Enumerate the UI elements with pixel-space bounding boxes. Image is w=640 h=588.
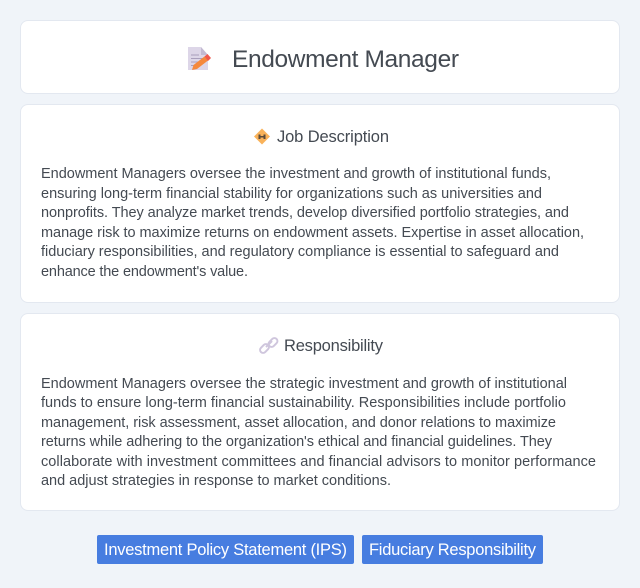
text block: responsibility: collaborate with investment committees and financial advisors to monitor performance [41, 454, 596, 470]
heading: job description: Job Description [277, 128, 389, 146]
text block: responsibility: funds to ensure long-term financial sustainability. Responsibilities include portfolio [41, 395, 566, 411]
text block: responsibility [41, 376, 596, 489]
text block: job description [41, 166, 584, 280]
tag: fiduciary responsibility: Fiduciary Responsibility [369, 541, 537, 559]
tag: investment policy statement [97, 535, 354, 564]
text block: responsibility: management, risk assessment, asset allocation, and donor relations to maximize [41, 415, 556, 431]
icon: job description diamond [254, 128, 270, 144]
text block: job description: fiduciary responsibilities, and regulatory compliance is essential to safeguard and [41, 244, 559, 260]
text block: job description: manage risk to maximize returns on endowment assets. Expertise in asset allocation, [41, 225, 584, 241]
text block: job description: nonprofits. They analyze market trends, develop diversified portfolio strategies, and [41, 205, 569, 221]
title: Endowment Manager [232, 46, 459, 73]
heading: responsibility: Responsibility [284, 337, 384, 355]
panel: job description card [20, 104, 620, 303]
text block: responsibility: and adjust strategies in response to market conditions. [41, 473, 391, 489]
panel: title card [20, 20, 620, 94]
icon: document with pencil [188, 47, 211, 70]
icon: chain link [259, 337, 279, 354]
text block: responsibility: Endowment Managers oversee the strategic investment and growth of institutional [41, 376, 567, 392]
tag: fiduciary responsibility [362, 535, 543, 564]
text block: job description: ensuring long-term financial stability for organizations such as universities and [41, 186, 542, 202]
text block: job description: enhance the endowment's value. [41, 264, 248, 280]
text block: job description: Endowment Managers oversee the investment and growth of institutional funds, [41, 166, 551, 182]
tag: investment policy statement: Investment Policy Statement (IPS) [104, 541, 347, 559]
text block: responsibility: returns while adhering to the organization's ethical and financial guidelines. They [41, 434, 553, 450]
panel: responsibility card [20, 313, 620, 511]
